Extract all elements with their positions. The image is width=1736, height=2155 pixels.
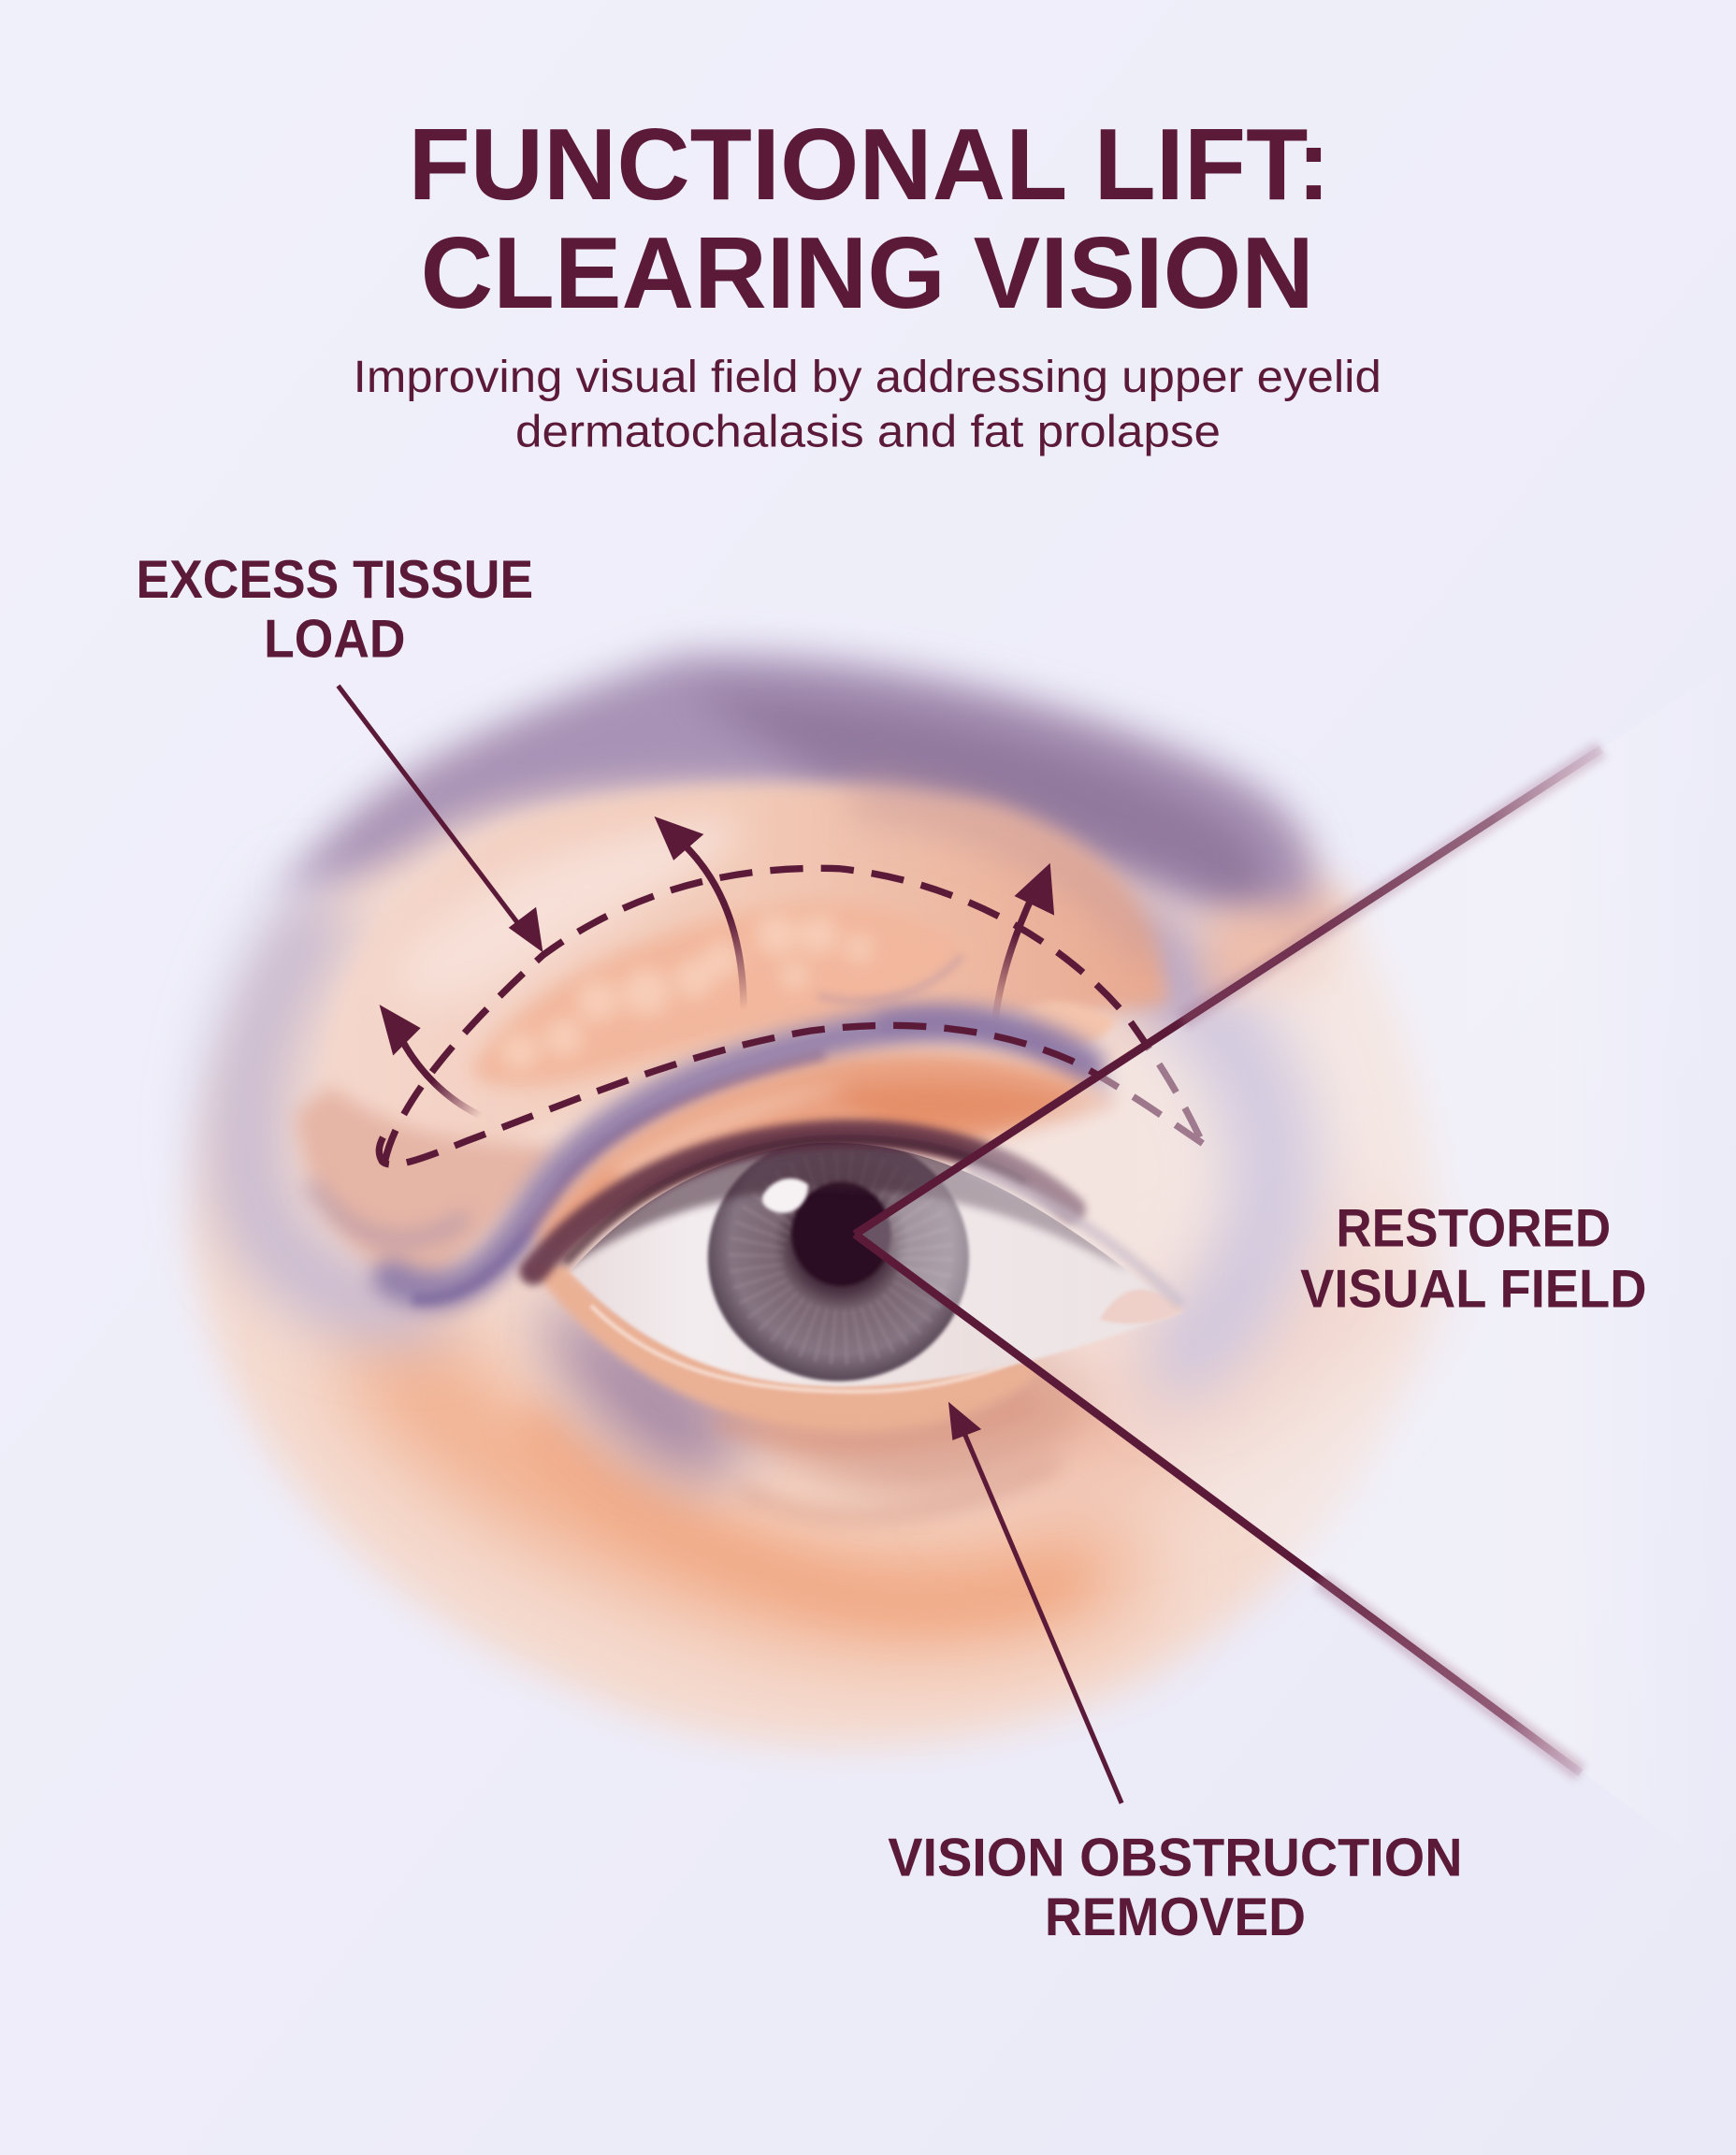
label: vision obstruction removed: VISION OBSTRUCTION xyxy=(888,1829,1463,1888)
title xyxy=(408,108,1330,330)
label: excess tissue load xyxy=(136,550,533,669)
outer lid lines xyxy=(969,1168,1182,1306)
temple peach xyxy=(1195,893,1353,1004)
catchlight xyxy=(762,1179,808,1213)
upper lid fold xyxy=(327,786,1168,1162)
label: restored visual field: RESTORED xyxy=(1336,1199,1611,1259)
title: CLEARING VISION xyxy=(421,217,1314,330)
label: vision obstruction removed xyxy=(888,1829,1463,1947)
label: vision obstruction removed: REMOVED xyxy=(1045,1887,1306,1947)
lid shadow xyxy=(564,1134,1127,1271)
infographic canvas xyxy=(139,128,1644,1936)
upper dashed marking xyxy=(384,868,1203,1162)
lower lid xyxy=(529,1265,1051,1443)
title: FUNCTIONAL LIFT: xyxy=(408,108,1330,222)
caruncle xyxy=(1100,1290,1185,1323)
lateral fold skin xyxy=(296,1086,557,1279)
subtitle: dermatochalasis and fat prolapse xyxy=(515,407,1221,457)
skin base xyxy=(193,710,1435,1746)
label: excess tissue load: EXCESS TISSUE xyxy=(136,550,533,610)
brow and orbital shadow xyxy=(245,655,1317,1361)
skin highlight xyxy=(398,817,737,1004)
subtitle xyxy=(354,352,1382,457)
visual field wedge lines xyxy=(855,749,1601,1773)
callout arrow: obstruction removed xyxy=(948,1402,1121,1803)
callout arrow: excess tissue xyxy=(339,686,542,952)
subtitle: Improving visual field by addressing upper eyelid xyxy=(354,352,1382,402)
mottled fold xyxy=(310,1182,468,1240)
lift arrow left xyxy=(380,1005,481,1116)
lash line xyxy=(533,1134,1072,1271)
eyeball xyxy=(564,1134,1182,1387)
lift arrow center xyxy=(654,817,744,1010)
fat pad xyxy=(473,902,1116,1086)
iris xyxy=(708,1134,969,1381)
lid highlight xyxy=(612,1080,852,1185)
label: restored visual field xyxy=(1300,1199,1646,1319)
eyelid crease xyxy=(392,1020,1107,1299)
lower dashed marking xyxy=(379,1025,1203,1164)
eye illustration xyxy=(174,630,1607,1804)
upper fold mauve shading xyxy=(852,797,1162,955)
label: restored visual field: VISUAL FIELD xyxy=(1300,1259,1646,1319)
iris fibres xyxy=(756,1178,926,1338)
restored field veil xyxy=(855,661,1736,1886)
lift arrow right xyxy=(995,863,1054,1020)
label: excess tissue load: LOAD xyxy=(264,609,406,669)
eyelid platform xyxy=(539,1052,1121,1257)
under-eye shadow xyxy=(542,1299,743,1476)
pupil xyxy=(791,1182,890,1286)
lid orange core xyxy=(825,1084,1086,1129)
